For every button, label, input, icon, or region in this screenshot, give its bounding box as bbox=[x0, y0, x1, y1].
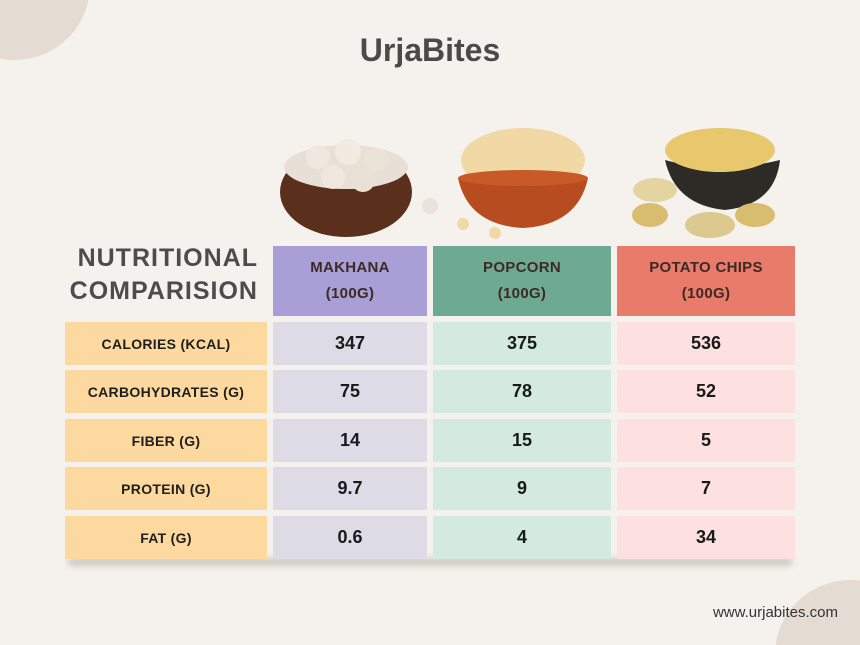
row: fat: FAT (G) bbox=[140, 530, 192, 546]
row: calories: 536 bbox=[691, 333, 721, 353]
row: fat: 0.6 bbox=[337, 527, 363, 547]
header: popcorn: (100G) bbox=[498, 285, 546, 302]
icon: chips bowl bbox=[632, 128, 780, 238]
row: fiber: 5 bbox=[701, 430, 711, 450]
heading: nutritional comparision bbox=[70, 244, 258, 305]
header: potato chips bbox=[617, 246, 795, 316]
header: popcorn bbox=[433, 246, 611, 316]
row: calories bbox=[65, 322, 795, 365]
row: fiber: 14 bbox=[340, 430, 360, 450]
table shadow bbox=[68, 558, 792, 566]
row: fat: 34 bbox=[696, 527, 716, 547]
row: protein: 9 bbox=[517, 478, 527, 498]
row: carbohydrates: 78 bbox=[512, 381, 532, 401]
title: UrjaBites bbox=[360, 32, 500, 68]
row: carbohydrates: CARBOHYDRATES (G) bbox=[88, 384, 244, 400]
row: fat bbox=[65, 516, 795, 559]
row: carbohydrates: 75 bbox=[340, 381, 360, 401]
header: makhana: (100G) bbox=[326, 285, 374, 302]
heading: nutritional comparision: COMPARISION bbox=[70, 277, 258, 305]
row: calories: 347 bbox=[335, 333, 365, 353]
row: fiber bbox=[65, 419, 795, 462]
icon: popcorn bowl bbox=[457, 128, 588, 239]
decorative corner top-left bbox=[0, 0, 88, 60]
decorative corner bottom-right bbox=[776, 580, 860, 645]
header: popcorn: POPCORN bbox=[483, 259, 561, 276]
row: protein: PROTEIN (G) bbox=[121, 480, 211, 496]
row: calories: 375 bbox=[507, 333, 537, 353]
row: fiber: FIBER (G) bbox=[132, 432, 200, 448]
row: carbohydrates: 52 bbox=[696, 381, 716, 401]
header: makhana bbox=[273, 246, 427, 316]
row: fiber: 15 bbox=[512, 430, 532, 450]
row: calories: CALORIES (KCAL) bbox=[102, 336, 230, 352]
icon: makhana bowl bbox=[280, 139, 438, 237]
row: protein: 9.7 bbox=[337, 478, 363, 498]
header: potato chips: (100G) bbox=[682, 285, 730, 302]
footer url: www.urjabites.com bbox=[713, 604, 838, 621]
header: makhana: MAKHANA bbox=[310, 259, 390, 276]
heading: nutritional comparision: NUTRITIONAL bbox=[78, 244, 258, 272]
row: fat: 4 bbox=[517, 527, 527, 547]
row: carbohydrates bbox=[65, 370, 795, 413]
row: protein: 7 bbox=[701, 478, 711, 498]
row: protein bbox=[65, 467, 795, 510]
header: potato chips: POTATO CHIPS bbox=[649, 259, 763, 276]
